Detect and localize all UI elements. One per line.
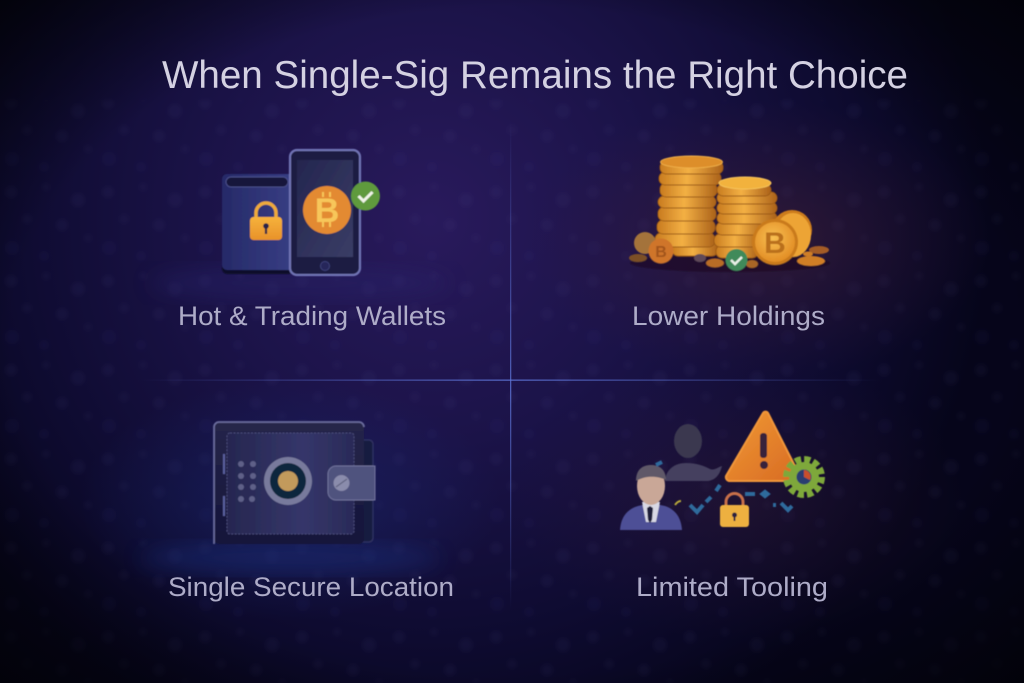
keypad dots [238,461,256,502]
icon: wallet and phone [222,150,380,275]
large coin [752,210,812,265]
label: Lower Holdings [632,301,825,331]
phone with bitcoin coin: B [315,192,339,230]
hinges [223,454,225,474]
short stack [714,177,777,258]
label: Limited Tooling [636,572,828,602]
check badge [351,182,380,210]
front person [620,465,682,530]
gear [787,460,821,494]
rear person [665,424,722,481]
title: When Single-Sig Remains the Right Choice [162,54,908,97]
dial [264,457,312,505]
phone with bitcoin coin [290,150,360,275]
panel: lower holdings [629,156,830,331]
safe body [214,422,364,544]
small padlock [720,494,749,527]
warning triangle [726,412,800,481]
dashed connectors [656,462,792,512]
panel: limited tooling [620,412,828,602]
panel: hot and trading wallets [178,150,446,331]
panel: single secure location [168,422,454,602]
small coins: B [655,244,667,261]
clasp [328,466,375,500]
label: Hot & Trading Wallets [178,301,446,331]
rear wallet layer [350,440,373,542]
check badge [726,249,748,271]
label: Single Secure Location [168,572,454,602]
icon: wallet safe [214,422,375,544]
small coins [629,232,829,268]
large coin: B [764,227,786,260]
icon: people, warning, gear and lock [620,412,821,530]
icon: coin stacks [629,156,830,272]
tall stack [655,156,723,256]
wallet with padlock [222,174,294,274]
